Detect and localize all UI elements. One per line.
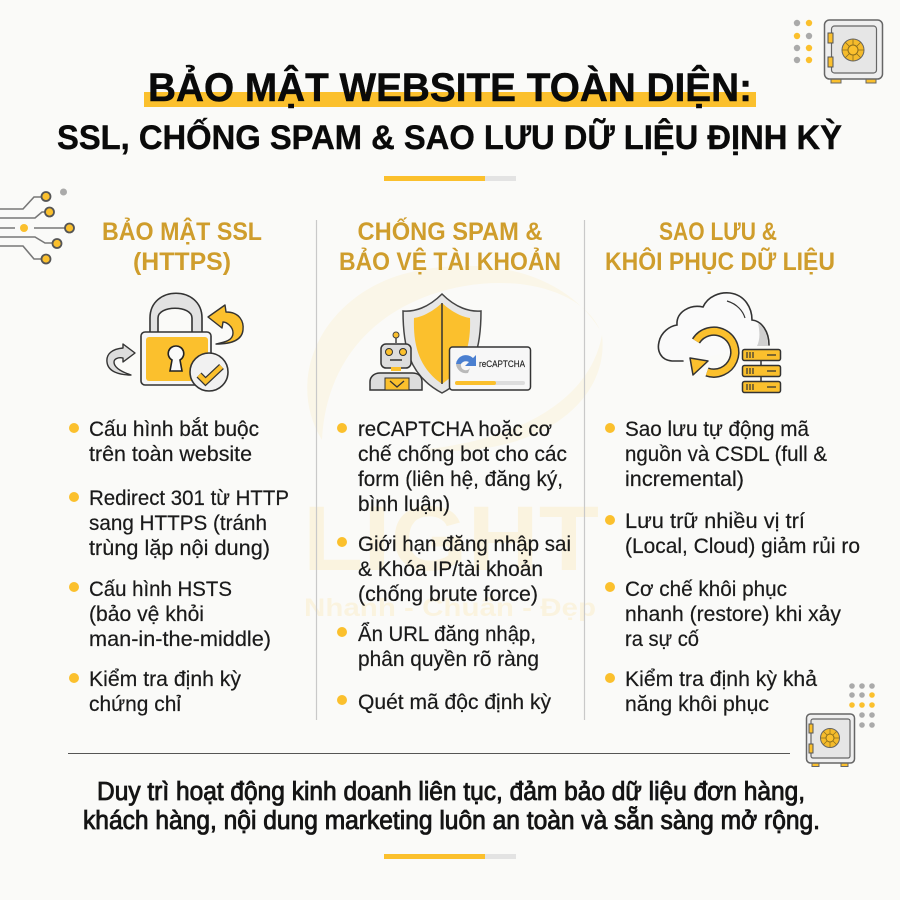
title (57, 66, 842, 157)
bullet list: backup: Lưu trữ nhiều vị trí (625, 510, 805, 533)
panel: backup (605, 218, 860, 716)
icon: shield, robot and reCAPTCHA (370, 294, 530, 393)
heading: anti-spam: CHỐNG SPAM & (358, 216, 542, 246)
bullet list: backup: ra sự cố (625, 628, 699, 651)
bullet list: anti-spam: bình luận) (358, 493, 450, 516)
bullet list: backup: Cơ chế khôi phục (625, 578, 787, 601)
reCAPTCHA label: reCAPTCHA (479, 359, 526, 370)
bullet list: SSL: Redirect 301 từ HTTP (89, 487, 289, 510)
bullet list: anti-spam: (chống brute force) (358, 583, 538, 606)
icon: safe bottom right with dots (806, 683, 875, 766)
title line 2: SSL, CHỐNG SPAM & SAO LƯU DỮ LIỆU ĐỊNH KỲ (57, 117, 842, 157)
watermark logo (303, 266, 603, 622)
bullet list: anti-spam: Giới hạn đăng nhập sai (358, 533, 571, 556)
bullet list: SSL: (bảo vệ khỏi (89, 603, 204, 626)
bullet list: backup: nhanh (restore) khi xảy (625, 603, 841, 626)
bullet list: SSL: Kiểm tra định kỳ (89, 668, 242, 691)
icon: cloud, restore arrow and server (658, 293, 780, 392)
bullet list: backup (605, 418, 860, 716)
icon: safe top right with dots (794, 20, 882, 83)
bullet list: anti-spam: & Khóa IP/tài khoản (358, 558, 543, 581)
footer message (83, 778, 820, 835)
bullet list: SSL: Cấu hình HSTS (89, 578, 232, 601)
footer divider (68, 752, 790, 754)
bottom accent bar (384, 854, 516, 859)
bullet list: anti-spam (337, 418, 571, 714)
bullet list: backup: nguồn và CSDL (full & (625, 443, 827, 466)
bullet list: backup: Kiểm tra định kỳ khả (625, 668, 817, 691)
bullet list: anti-spam: chế chống bot cho các (358, 443, 567, 466)
panel: anti-spam (337, 216, 571, 714)
bullet list: anti-spam: Ẩn URL đăng nhập, (358, 623, 536, 646)
panel: backup: KHÔI PHỤC DỮ LIỆU (605, 246, 835, 276)
heading: SSL: BẢO MẬT SSL (102, 216, 262, 246)
column dividers (316, 220, 584, 720)
panel: SSL: (HTTPS) (133, 248, 231, 276)
bullet list: SSL: chứng chỉ (89, 693, 181, 716)
footer message: khách hàng, nội dung marketing luôn an toàn và sẵn sàng mở rộng. (83, 806, 820, 835)
footer message: Duy trì hoạt động kinh doanh liên tục, đảm bảo dữ liệu đơn hàng, (97, 778, 805, 806)
icon: padlock (107, 293, 243, 391)
bullet list: SSL: sang HTTPS (tránh (89, 512, 267, 535)
bullet list: SSL: trên toàn website (89, 443, 252, 466)
bullet list: backup: incremental) (625, 468, 744, 491)
heading: backup: SAO LƯU & (659, 218, 777, 246)
bullet list: backup: năng khôi phục (625, 693, 769, 716)
title divider (384, 176, 516, 181)
panel: SSL (69, 216, 289, 716)
bullet list: anti-spam: reCAPTCHA hoặc cơ (358, 418, 552, 441)
bullet list: anti-spam: form (liên hệ, đăng ký, (358, 468, 563, 491)
bullet list: backup: (Local, Cloud) giảm rủi ro (625, 535, 860, 558)
bullet list: SSL (69, 418, 289, 716)
watermark logo: Nhanh - Chuẩn - Đẹp (304, 594, 596, 622)
bullet list: SSL: man-in-the-middle) (89, 628, 271, 651)
bullet list: backup: Sao lưu tự động mã (625, 418, 809, 441)
watermark logo: LIGHT (303, 488, 599, 590)
panel: anti-spam: BẢO VỆ TÀI KHOẢN (339, 246, 561, 276)
icon: circuit decoration left (0, 188, 74, 264)
bullet list: SSL: trùng lặp nội dung) (89, 537, 270, 560)
bullet list: SSL: Cấu hình bắt buộc (89, 418, 259, 441)
bullet list: anti-spam: phân quyền rõ ràng (358, 648, 539, 671)
bullet list: anti-spam: Quét mã độc định kỳ (358, 691, 551, 714)
title highlight bar (144, 92, 756, 107)
title line 1: BẢO MẬT WEBSITE TOÀN DIỆN: (148, 66, 752, 110)
